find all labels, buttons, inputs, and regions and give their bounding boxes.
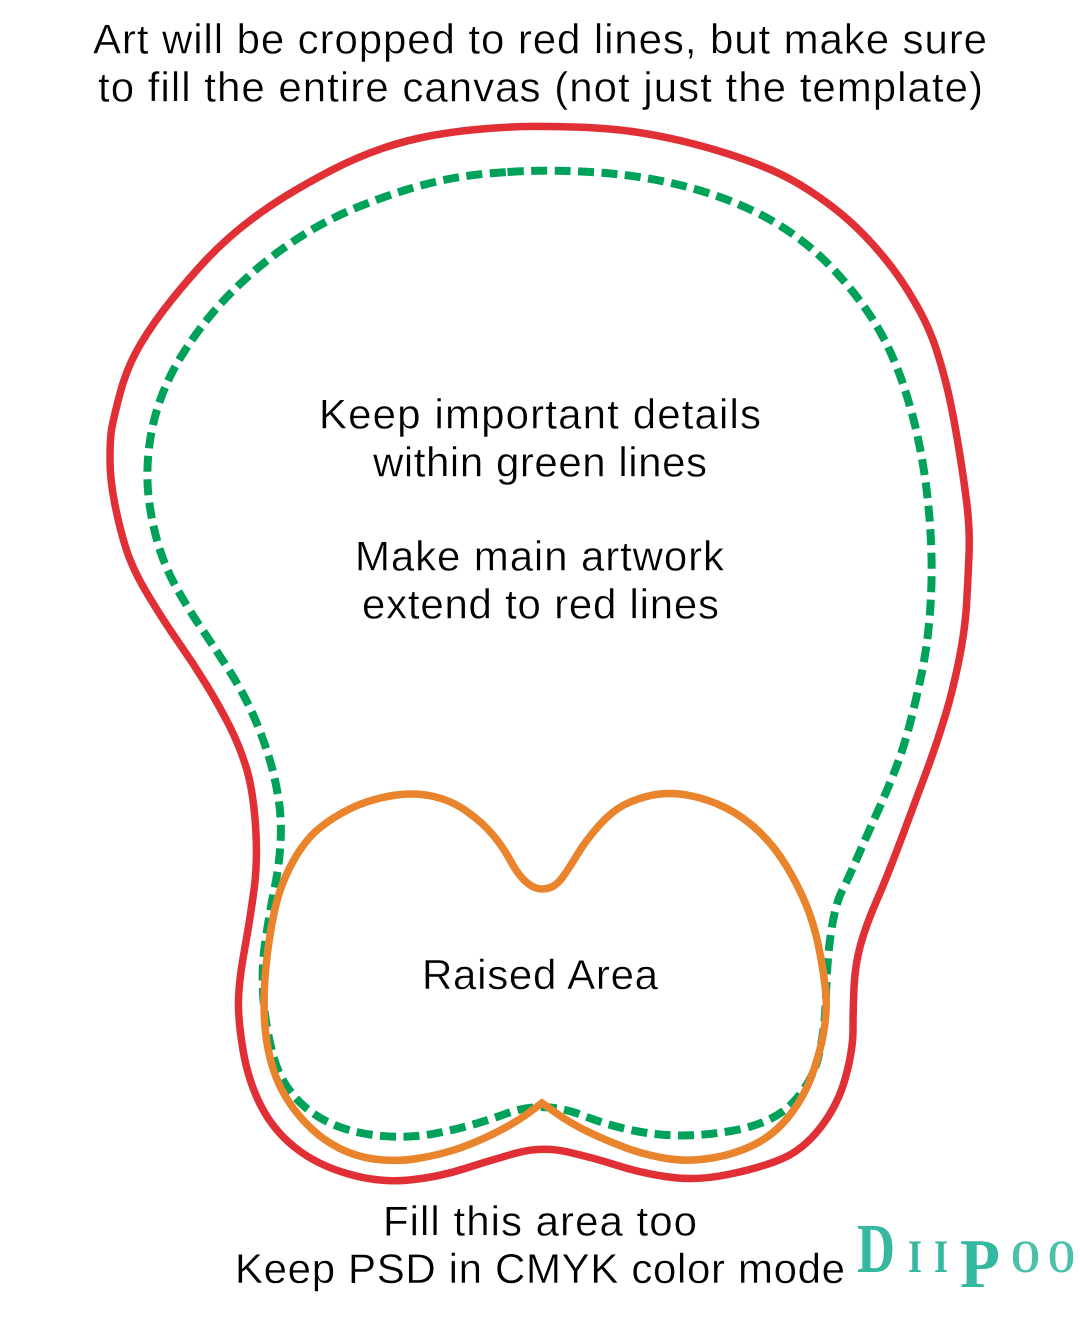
heading: cropping instructions: to fill the entire canvas (not just the template) [98, 64, 983, 110]
text: extend artwork to red lines [355, 532, 725, 628]
orange raised area outline [264, 793, 826, 1160]
red crop outline [110, 126, 969, 1181]
text: extend artwork to red lines: extend to red lines [362, 580, 719, 628]
logo: Diipoo watermark: D [857, 1211, 895, 1288]
text: keep details within green lines [319, 390, 761, 486]
footer instructions: Keep PSD in CMYK color mode [235, 1245, 845, 1292]
heading: cropping instructions: Art will be cropped to red lines, but make sure [93, 16, 987, 62]
logo: Diipoo watermark: P [960, 1226, 1000, 1303]
footer instructions: Fill this area too [383, 1198, 697, 1244]
logo: Diipoo watermark: I [934, 1231, 948, 1283]
text: keep details within green lines: Keep important details [319, 390, 761, 438]
footer instructions [235, 1198, 845, 1292]
text: keep details within green lines: within green lines [372, 438, 707, 486]
logo: Diipoo watermark: O [1011, 1231, 1040, 1283]
heading: cropping instructions [93, 16, 987, 110]
logo: Diipoo watermark: I [908, 1231, 922, 1283]
label: raised area: Raised Area [422, 951, 659, 998]
text: extend artwork to red lines: Make main artwork [355, 532, 725, 580]
green dashed safe-area outline [147, 171, 932, 1137]
logo: Diipoo watermark [857, 1211, 1075, 1303]
